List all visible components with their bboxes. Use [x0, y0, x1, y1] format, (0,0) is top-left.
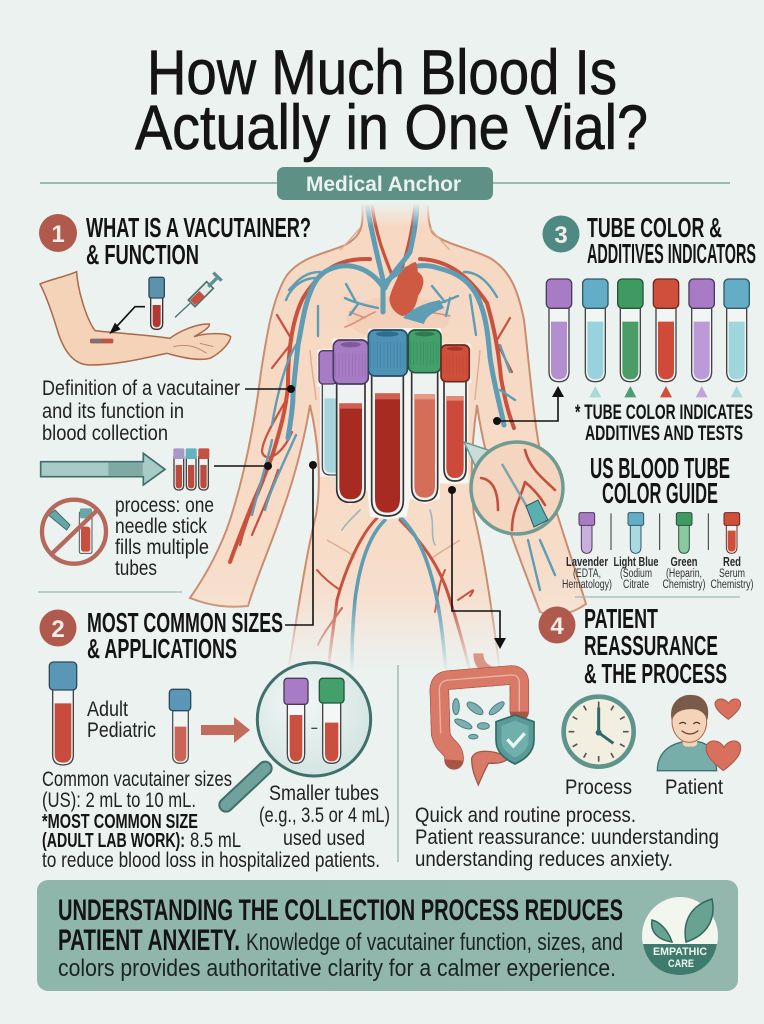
heart	[390, 262, 444, 324]
colour guide labels: Citrate	[623, 579, 649, 591]
badge: empathic care: EMPATHIC	[653, 946, 707, 958]
text: common vacutainer sizes: (US): 2 mL to 10 mL.	[42, 788, 196, 812]
summary text: Knowledge of vacutainer function, sizes, and	[246, 929, 623, 956]
six coloured tubes	[546, 279, 749, 397]
heading 1	[86, 212, 311, 270]
heading 1: WHAT IS A VACUTAINER?	[86, 212, 311, 243]
colour guide labels: Green	[670, 555, 698, 569]
labels: process, patient	[565, 775, 723, 799]
magnified vein callout	[464, 442, 563, 534]
title: Actually in One Vial?	[135, 93, 648, 163]
colour guide labels: Light Blue	[614, 555, 659, 569]
section 2: most common sizes	[40, 607, 390, 872]
number badge 1: 1	[51, 221, 65, 248]
icon: patient with hearts	[657, 695, 741, 771]
number badge 4	[538, 606, 576, 644]
text: definition of a vacutainer: blood collection	[42, 421, 168, 445]
icon: intestine with shield	[439, 653, 534, 785]
heading 2	[87, 607, 283, 664]
section 3: tube colour	[542, 212, 756, 591]
text: smaller tubes: used used	[283, 826, 365, 850]
colour guide mini tubes	[579, 513, 740, 553]
text: quick and routine: understanding reduces anxiety.	[415, 847, 673, 871]
labels: adult, pediatric: Adult	[87, 697, 128, 721]
arrow	[201, 717, 250, 743]
text: definition of a vacutainer: Definition of a vacutainer	[42, 376, 240, 400]
text: quick and routine: Patient reassurance: uunderstanding	[415, 825, 719, 849]
title: How Much Blood Is	[147, 38, 617, 108]
tube: red small	[441, 345, 469, 481]
colour guide labels: Lavender	[566, 555, 608, 569]
labels: adult, pediatric: Pediatric	[87, 718, 156, 742]
colour guide labels	[562, 555, 754, 591]
text: common vacutainer sizes: Common vacutainer sizes	[42, 767, 232, 791]
colour guide labels: Red	[723, 555, 741, 569]
badge: medical anchor: Medical Anchor	[306, 173, 461, 196]
tube: lavender large	[333, 340, 368, 502]
badge: medical anchor	[277, 167, 493, 200]
text: process: fills multiple	[115, 535, 209, 559]
arrow to tubes	[41, 453, 165, 485]
arteries	[230, 205, 514, 672]
labels: adult, pediatric	[87, 697, 156, 742]
body contours	[310, 228, 480, 558]
icon: three tubes	[173, 448, 209, 490]
labels: process, patient: Patient	[665, 775, 723, 799]
summary text	[58, 894, 623, 982]
leader dots and arrowheads	[264, 385, 564, 649]
heading 2: & APPLICATIONS	[87, 633, 237, 664]
section 4: patient reassurance	[415, 603, 741, 871]
text: common vacutainer sizes: (ADULT LAB WORK):	[42, 830, 185, 852]
tube: blue large	[368, 330, 407, 516]
heading 4	[584, 603, 727, 689]
text: smaller tubes: (e.g., 3.5 or 4 mL)	[259, 803, 390, 827]
number badge 2: 2	[51, 616, 65, 643]
colour guide labels: (Sodium	[620, 568, 652, 580]
text: process: process: one	[115, 493, 214, 517]
text: definition of a vacutainer	[42, 376, 240, 445]
colour guide labels: Chemistry)	[662, 579, 706, 591]
section 1: what is a vacutainer	[39, 212, 311, 580]
heading: US blood tube colour guide	[590, 453, 730, 510]
summary text: PATIENT ANXIETY.	[58, 924, 240, 957]
leader lines	[214, 389, 558, 640]
white halo	[317, 328, 471, 519]
text: quick and routine	[415, 803, 719, 871]
tube: light blue behind	[319, 351, 337, 475]
central blood tubes	[317, 328, 471, 519]
text: process: needle stick	[115, 514, 207, 538]
icon: no repeat needle sticks	[42, 500, 106, 564]
text: common vacutainer sizes: 8.5 mL	[190, 828, 241, 852]
heading 3	[587, 212, 756, 269]
number badge 2	[40, 610, 76, 646]
veins	[252, 205, 555, 672]
text: quick and routine: Quick and routine process.	[415, 803, 636, 827]
icon: clock	[564, 697, 634, 767]
text: common vacutainer sizes	[42, 767, 380, 872]
colour guide labels: (EDTA,	[573, 568, 601, 580]
text: common vacutainer sizes: to reduce blood loss in hospitalized patients.	[42, 848, 380, 872]
anatomy figure: body with veins	[190, 203, 586, 672]
body silhouette	[190, 203, 586, 672]
number badge 4: 4	[550, 613, 564, 640]
text: definition of a vacutainer: and its function in	[42, 399, 184, 423]
title	[135, 38, 648, 163]
number badge 3	[542, 216, 580, 252]
badge: empathic care	[642, 897, 718, 975]
tube illustrations: adult and pediatric	[49, 662, 191, 765]
heading 1: & FUNCTION	[86, 239, 199, 270]
summary text: colors provides authoritative clarity for a calmer experience.	[58, 955, 616, 982]
colour guide labels: (Heparin,	[666, 568, 702, 580]
tube: green with salmon fill	[408, 330, 441, 501]
text: process	[115, 493, 214, 580]
colour guide labels: Serum	[719, 568, 745, 580]
icon: arm with tube and syringe	[40, 272, 231, 365]
badge: empathic care: CARE	[668, 958, 694, 970]
text: process: tubes	[115, 556, 157, 580]
text: smaller tubes: Smaller tubes	[269, 781, 379, 805]
number badge 3: 3	[554, 222, 568, 249]
text: common vacutainer sizes: *MOST COMMON SIZE	[42, 811, 198, 833]
panel: bottom summary	[37, 880, 738, 991]
heading 4: PATIENT	[584, 603, 658, 634]
note: tube color indicates	[575, 401, 753, 445]
text: smaller tubes	[259, 781, 390, 850]
colour guide labels: Hematology)	[562, 579, 612, 591]
heading 2: MOST COMMON SIZES	[87, 607, 283, 638]
labels: process, patient: Process	[565, 775, 632, 799]
number badge 1	[39, 214, 77, 252]
chest shading	[346, 296, 450, 336]
magnifier with small tubes	[226, 663, 371, 805]
